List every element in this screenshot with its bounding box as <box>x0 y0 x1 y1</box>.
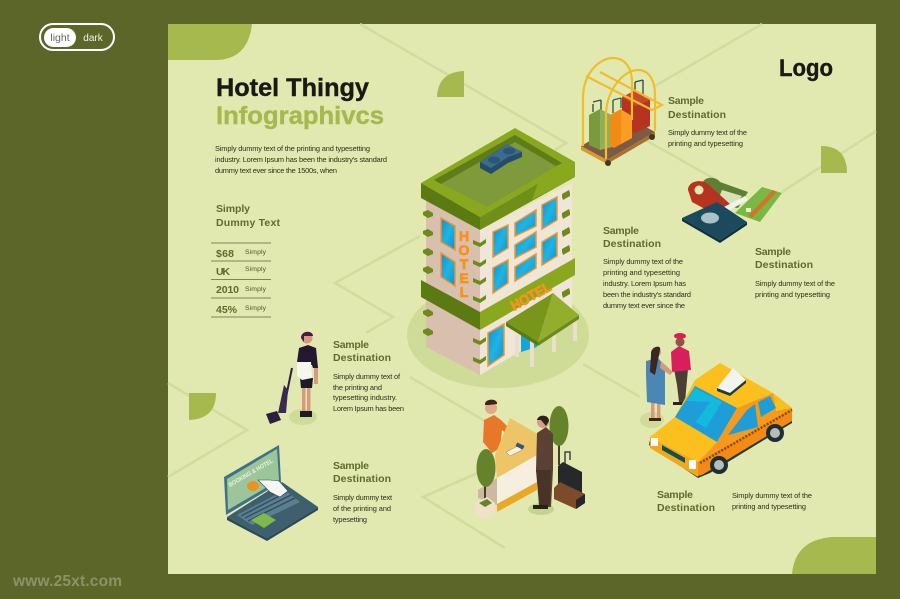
panel: infographic background <box>168 24 876 574</box>
quarter shape: right <box>821 146 847 173</box>
chassis <box>649 415 792 478</box>
legs and shoes <box>300 387 312 417</box>
text: centre destination <box>603 225 691 310</box>
corner shape: top left <box>168 24 252 60</box>
stats table: $68 <box>216 248 234 260</box>
text: right destination: Sample <box>755 246 791 258</box>
hood <box>650 417 717 462</box>
side windows <box>728 404 758 435</box>
quarter shape: top centre <box>437 71 464 97</box>
text: centre destination: Destination <box>603 238 661 250</box>
illustration: maid with vacuum <box>266 332 318 425</box>
text: centre destination: industry. Lorem Ipsum has <box>603 279 686 288</box>
text: right destination <box>755 246 835 299</box>
keyboard <box>237 490 300 525</box>
quarter shape: left <box>189 393 216 420</box>
illustration: couple and taxi <box>640 333 792 478</box>
text: laptop destination: Simply dummy text <box>333 493 392 502</box>
credit card <box>735 187 782 222</box>
title: Infographivcs <box>216 102 384 130</box>
text: taxi destination: Sample <box>657 489 693 501</box>
window band <box>698 393 792 462</box>
awning <box>506 293 579 346</box>
text: taxi destination: Simply dummy text of the <box>732 491 812 500</box>
text: right destination: Simply dummy text of the <box>755 279 835 288</box>
luggage <box>554 452 585 509</box>
card on keyboard <box>251 513 276 528</box>
intro text: industry. Lorem Ipsum has been the industry's standard <box>215 155 387 164</box>
roof <box>421 128 575 230</box>
stats table: Simply <box>245 305 267 312</box>
intro text <box>215 144 387 175</box>
side panel <box>698 408 792 476</box>
windshield <box>675 386 737 442</box>
text: cart destination <box>668 95 747 148</box>
grille <box>662 445 685 463</box>
illustration: luggage cart <box>581 58 662 166</box>
stats table <box>211 243 271 317</box>
vertical hotel sign: O <box>459 242 470 258</box>
illustration: reception desk <box>475 400 585 519</box>
guest <box>528 416 554 515</box>
text: taxi destination: Destination <box>657 502 715 514</box>
desk <box>478 418 543 512</box>
text: centre destination: dummy text ever since the <box>603 301 685 310</box>
title: Hotel Thingy <box>216 74 369 102</box>
title <box>216 74 384 130</box>
illustration: laptop booking: BOOKING & HOTEL <box>228 458 275 489</box>
passport <box>682 202 747 240</box>
entrance door <box>521 325 537 352</box>
plant right <box>550 406 568 465</box>
text: maid destination: Destination <box>333 352 391 364</box>
stats table: Simply <box>245 249 267 256</box>
bellman <box>671 333 691 405</box>
text: maid destination: typesetting industry. <box>333 393 397 402</box>
windows <box>441 197 557 366</box>
rooftop AC units <box>480 144 522 174</box>
checker strip <box>700 410 792 463</box>
text: maid destination: Sample <box>333 339 369 351</box>
front face <box>650 437 698 477</box>
text: maid destination <box>333 339 404 413</box>
vertical hotel sign: E <box>459 270 469 286</box>
text: cart destination: printing and typesetting <box>668 139 743 148</box>
lower band <box>421 258 575 330</box>
text: laptop destination: typesetting <box>333 515 367 524</box>
laptop screen <box>224 445 281 515</box>
body <box>297 332 318 388</box>
illustration: hotel building <box>407 128 589 388</box>
corner shape: bottom right <box>792 537 876 574</box>
watermark: www.25xt.com <box>12 573 122 590</box>
logo: Logo <box>779 55 833 82</box>
text: laptop destination <box>333 460 392 524</box>
roof and trunk <box>675 363 792 442</box>
stats table: 45% <box>216 304 238 316</box>
stats table: 2010 <box>216 284 239 296</box>
text: maid destination: Lorem Ipsum has been <box>333 404 404 413</box>
red door hanger <box>688 181 730 216</box>
illustration: laptop booking <box>224 445 318 541</box>
wheels <box>710 456 728 474</box>
headlights <box>651 438 658 446</box>
text: laptop destination: Destination <box>333 473 391 485</box>
intro text: dummy text ever since the 1500s, when <box>215 166 337 175</box>
intro text: Simply dummy text of the printing and typesetting <box>215 144 370 153</box>
pointing hand <box>258 480 288 497</box>
vacuum <box>266 368 292 424</box>
text: taxi destination: printing and typesetting <box>732 502 806 511</box>
green door hanger <box>702 178 748 208</box>
stats table: Simply <box>245 286 267 293</box>
text: laptop destination: of the printing and <box>333 504 391 513</box>
stats heading: Dummy Text <box>216 217 280 229</box>
vertical hotel sign <box>459 228 470 300</box>
woman <box>646 347 673 421</box>
text: cart destination: Destination <box>668 109 726 121</box>
stats table: UK <box>216 266 230 278</box>
taxi <box>649 363 792 478</box>
suitcases <box>589 80 650 150</box>
text: cart destination: Sample <box>668 95 704 107</box>
stats heading <box>216 203 280 229</box>
toggle: light / dark: dark <box>83 33 104 44</box>
white card strip <box>722 196 748 212</box>
text: maid destination: Simply dummy text of <box>333 372 401 381</box>
entrance sign: HOTEL <box>508 278 554 314</box>
toggle: light / dark: light <box>50 32 70 44</box>
stats table: Simply <box>245 266 267 273</box>
text: centre destination: printing and typesetting <box>603 268 680 277</box>
text: laptop destination: Sample <box>333 460 369 472</box>
vertical hotel sign: T <box>460 256 469 272</box>
text: centre destination: been the industry's standard <box>603 290 691 299</box>
stats heading: Simply <box>216 203 250 215</box>
laptop base <box>227 482 318 538</box>
text: right destination: Destination <box>755 259 813 271</box>
left wall <box>426 200 480 375</box>
cart arches <box>583 58 662 159</box>
text: cart destination: Simply dummy text of the <box>668 128 747 137</box>
text: centre destination: Sample <box>603 225 639 237</box>
button <box>247 481 259 491</box>
right wall <box>480 183 572 375</box>
text: taxi destination <box>657 489 812 514</box>
wall brackets <box>423 190 570 364</box>
entrance posts <box>515 313 577 367</box>
text: right destination: printing and typesetting <box>755 290 830 299</box>
vertical hotel sign: L <box>460 284 469 300</box>
plant left with pot <box>475 449 496 519</box>
receptionist <box>483 400 513 453</box>
text: centre destination: Simply dummy text of the <box>603 257 683 266</box>
text: maid destination: the printing and <box>333 383 382 392</box>
toggle: light / dark <box>40 24 114 50</box>
vertical hotel sign: H <box>459 228 469 244</box>
illustration: passport and cards <box>682 178 782 243</box>
taxi roof sign <box>717 368 746 393</box>
